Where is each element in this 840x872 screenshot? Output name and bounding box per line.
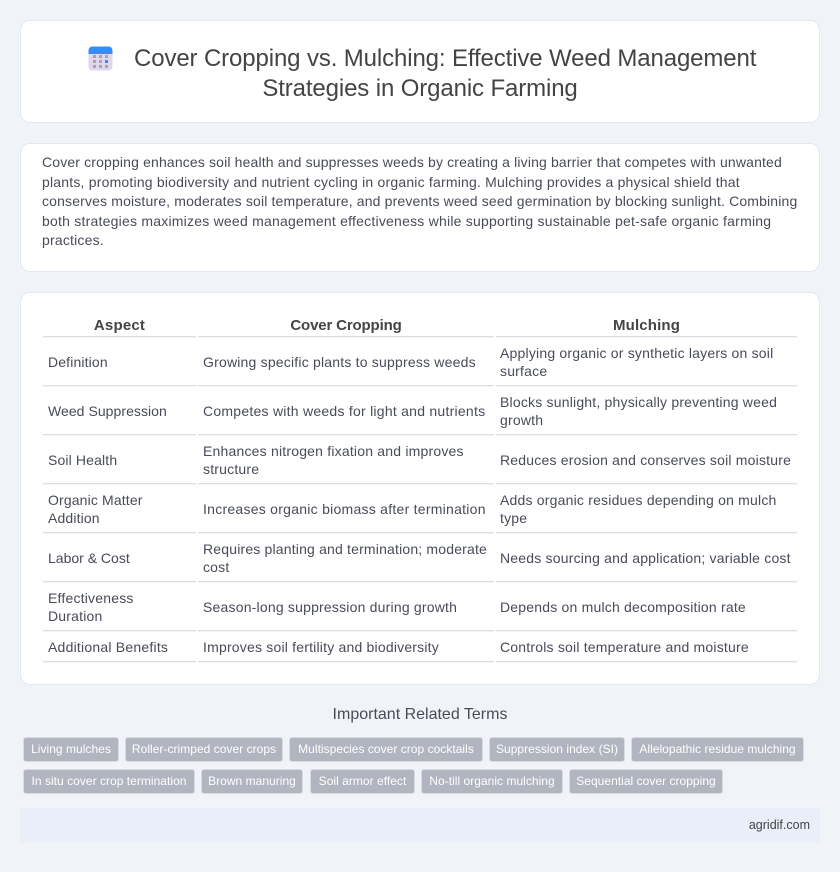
table rows: Soil Health	[48, 452, 117, 468]
text block: description: conserves moisture, moderates soil temperature, and prevents weed seed germination by blocking sunlight. Combining	[42, 193, 797, 209]
table rows: growth	[500, 412, 543, 428]
table rows: Enhances nitrogen fixation and improves	[203, 443, 464, 459]
table rows: Increases organic biomass after termination	[203, 501, 486, 517]
title	[134, 45, 756, 102]
tags: related terms: Sequential cover cropping	[576, 774, 716, 788]
table rows	[43, 336, 797, 663]
panel: comparison table	[20, 292, 820, 685]
tags: related terms: Suppression index (SI)	[496, 742, 618, 756]
table rows: Definition	[48, 354, 108, 370]
table rows: Applying organic or synthetic layers on soil	[500, 345, 773, 361]
tags: related terms: Soil armor effect	[319, 774, 406, 788]
table rows: Growing specific plants to suppress weeds	[203, 354, 476, 370]
table header: Mulching	[613, 317, 680, 334]
table rows: Season-long suppression during growth	[203, 599, 457, 615]
text block: description: plants, promoting biodiversity and nutrient cycling in organic farming. Mulching provides a physical shield that	[42, 174, 740, 190]
tags: related terms: Brown manuring	[208, 774, 296, 788]
tags: related terms: Multispecies cover crop cocktails	[298, 742, 474, 756]
panel: header	[20, 20, 820, 123]
heading: related terms: Important Related Terms	[333, 706, 507, 723]
table header: Aspect	[94, 317, 145, 334]
text block: description: Cover cropping enhances soil health and suppresses weeds by creating a living barrier that competes with unwanted	[42, 154, 782, 170]
table rows: cost	[203, 559, 229, 575]
tags: related terms: No-till organic mulching	[429, 774, 555, 788]
footer	[20, 808, 820, 842]
table rows: Labor & Cost	[48, 550, 130, 566]
table header: Cover Cropping	[290, 317, 402, 334]
table rows: Effectiveness	[48, 590, 134, 606]
table rows: Improves soil fertility and biodiversity	[203, 639, 439, 655]
title: Strategies in Organic Farming	[262, 74, 578, 102]
table rows: Reduces erosion and conserves soil moisture	[500, 452, 791, 468]
table rows: Adds organic residues depending on mulch	[500, 492, 777, 508]
table rows: Competes with weeds for light and nutrients	[203, 403, 485, 419]
title: Cover Cropping vs. Mulching: Effective Weed Management	[134, 45, 756, 72]
footer: source: agridif.com	[749, 818, 810, 832]
tags: related terms: Allelopathic residue mulching	[639, 742, 796, 756]
table rows: type	[500, 510, 527, 526]
table rows: Additional Benefits	[48, 639, 168, 655]
table rows: Addition	[48, 510, 100, 526]
table rows: Needs sourcing and application; variable cost	[500, 550, 791, 566]
table rows: surface	[500, 363, 547, 379]
text block: description	[42, 154, 797, 248]
table rows: Requires planting and termination; moderate	[203, 541, 487, 557]
tags: related terms	[23, 737, 804, 794]
tags: related terms: In situ cover crop termination	[32, 774, 186, 788]
icon: calendar	[88, 46, 112, 70]
table rows: Duration	[48, 608, 103, 624]
table rows: structure	[203, 461, 259, 477]
text block: description: practices.	[42, 232, 104, 248]
panel: description	[20, 143, 820, 272]
tags: related terms: Roller-crimped cover crops	[132, 742, 276, 756]
table rows: Blocks sunlight, physically preventing weed	[500, 394, 777, 410]
tags: related terms: Living mulches	[31, 742, 111, 756]
text block: description: both strategies maximizes weed management effectiveness while supporting sustainable pet-safe organic farming	[42, 212, 771, 228]
table header	[94, 317, 680, 334]
table rows: Depends on mulch decomposition rate	[500, 599, 746, 615]
table rows: Organic Matter	[48, 492, 143, 508]
table rows: Weed Suppression	[48, 403, 167, 419]
table rows: Controls soil temperature and moisture	[500, 639, 749, 655]
